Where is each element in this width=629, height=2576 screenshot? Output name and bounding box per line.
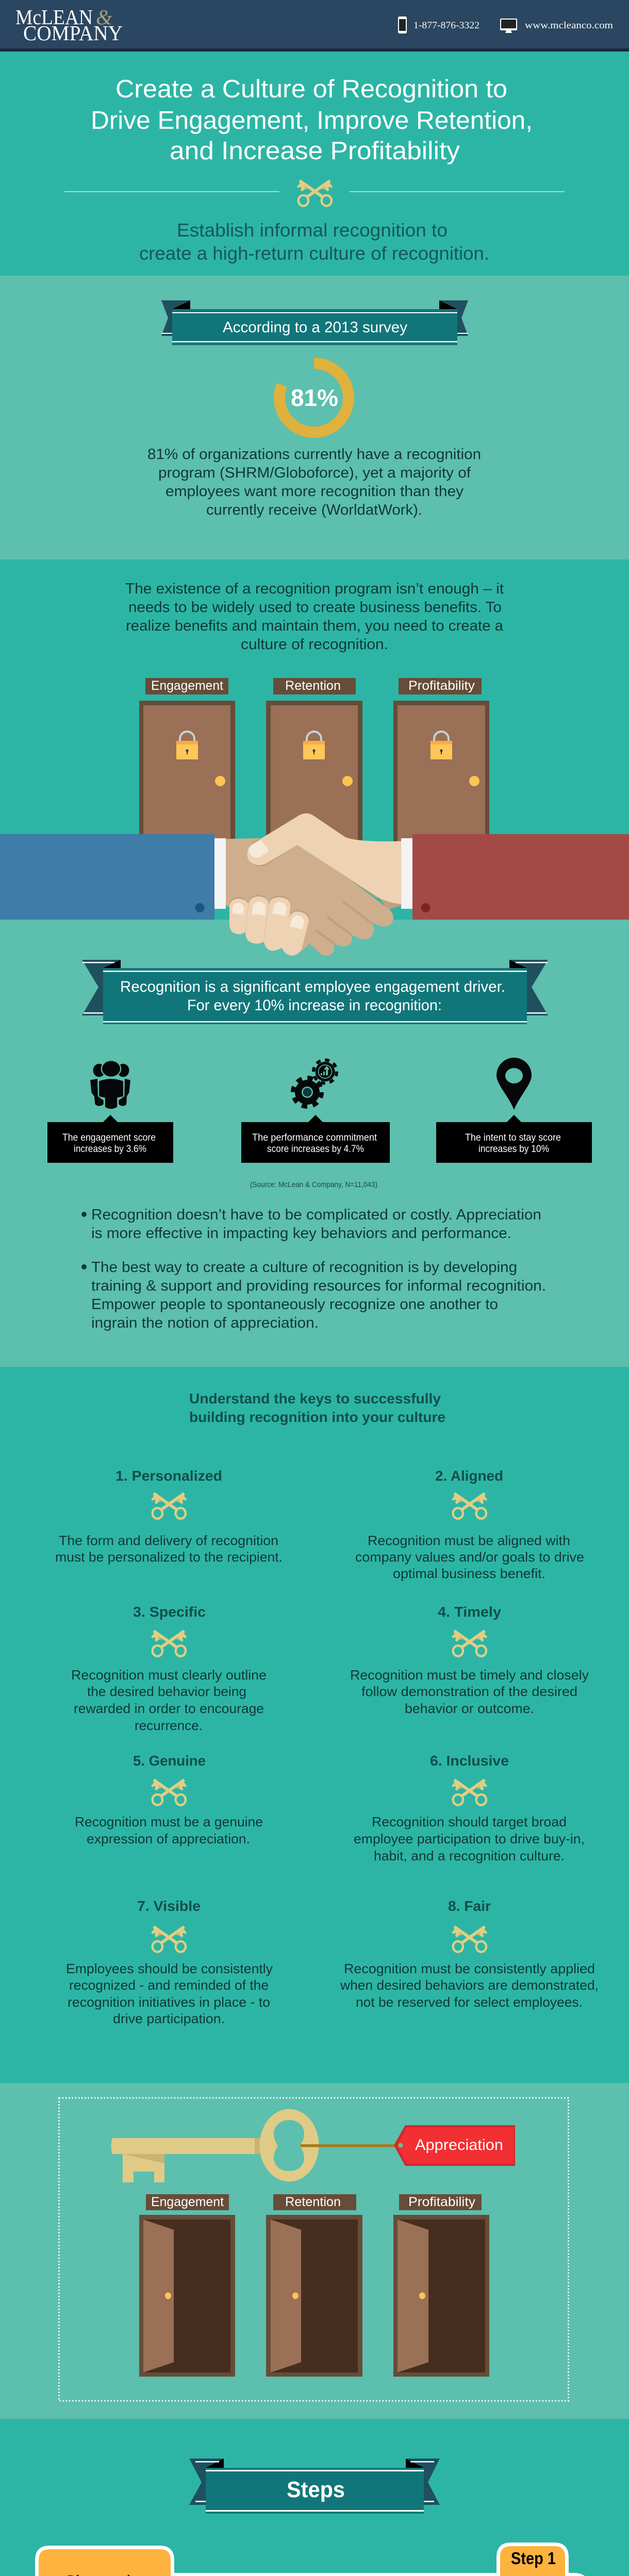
dotted frame — [59, 2098, 568, 2401]
ribbon: recognition driver: For every 10% increase in recognition: — [187, 997, 442, 1014]
panel: open door profitability: Profitability — [408, 2195, 476, 2209]
logo: & — [96, 5, 112, 29]
key 3: specific — [71, 1604, 267, 1733]
panel: locked door retention: Retention — [285, 679, 341, 693]
panel: open door profitability — [393, 2194, 489, 2377]
callout: engagement score: increases by 3.6% — [74, 1144, 146, 1155]
key 4: timely — [350, 1604, 589, 1716]
key 6: inclusive: habit, and a recognition culture. — [374, 1848, 565, 1863]
subtitle — [139, 219, 489, 264]
key 3: specific: rewarded in order to encourage — [74, 1701, 264, 1716]
key 6: inclusive: employee participation to drive buy-in, — [354, 1831, 585, 1846]
title — [91, 75, 533, 165]
ribbon: recognition driver: Recognition is a significant employee engagement driver. — [120, 978, 505, 995]
header bar — [0, 0, 629, 52]
ribbon: According to a 2013 survey: According to a 2013 survey — [223, 319, 407, 336]
ribbon: According to a 2013 survey — [161, 300, 468, 345]
string — [300, 2144, 401, 2147]
callout: performance commitment: The performance commitment — [252, 1132, 377, 1143]
survey paragraph: employees want more recognition than they — [165, 483, 464, 500]
key 5: genuine: expression of appreciation. — [87, 1831, 250, 1846]
key 7: visible — [66, 1898, 273, 2026]
key 7: visible: recognized - and reminded of the — [69, 1977, 269, 1993]
title: and Increase Profitability — [170, 137, 460, 165]
key 6: inclusive: 6. Inclusive — [430, 1753, 509, 1769]
heading: keys to success — [189, 1391, 445, 1425]
survey paragraph — [147, 446, 481, 518]
key 4: timely: 4. Timely — [438, 1604, 501, 1620]
panel: locked door profitability — [393, 678, 489, 845]
title: Drive Engagement, Improve Retention, — [91, 107, 533, 134]
key 2: aligned — [355, 1468, 584, 1581]
panel: locked door profitability: Profitability — [408, 679, 475, 693]
callout: performance commitment — [241, 1115, 390, 1163]
key 4: timely: Recognition must be timely and closely — [350, 1667, 589, 1683]
key 5: genuine: 5. Genuine — [133, 1753, 206, 1769]
key 5: genuine: Recognition must be a genuine — [75, 1814, 263, 1829]
existence paragraph: culture of recognition. — [241, 636, 388, 653]
key 5: genuine — [75, 1753, 263, 1846]
logo — [15, 5, 123, 45]
phone number: 1-877-876-3322 — [413, 20, 479, 31]
key 7: visible: Employees should be consistently — [66, 1961, 273, 1976]
key 2: aligned: company values and/or goals to drive — [355, 1549, 584, 1565]
key 8: fair — [340, 1898, 599, 2010]
callout: intent to stay — [436, 1115, 592, 1163]
key 8: fair: Recognition must be consistently applied — [344, 1961, 595, 1976]
tag: appreciation — [394, 2125, 515, 2166]
panel: step 1: Step 1 — [511, 2549, 556, 2568]
key 2: aligned: optimal business benefit. — [393, 1566, 545, 1581]
tag: appreciation: Appreciation — [415, 2137, 503, 2154]
existence paragraph: needs to be widely used to create business benefits. To — [128, 599, 502, 616]
source note: (Source: McLean & Company, N=11,043) — [250, 1180, 377, 1189]
survey paragraph: currently receive (WorldatWork). — [206, 502, 422, 518]
icon: gears — [293, 1060, 337, 1107]
donut chart: 81%: 81% — [291, 384, 338, 411]
existence paragraph: realize benefits and maintain them, you need to create a — [126, 618, 504, 634]
key 2: aligned: 2. Aligned — [435, 1468, 503, 1484]
subtitle: Establish informal recognition to — [177, 219, 448, 241]
key 3: specific: recurrence. — [135, 1718, 203, 1733]
subtitle: create a high-return culture of recognition. — [139, 243, 489, 264]
heading: keys to success: building recognition into your culture — [189, 1409, 445, 1425]
donut chart: 81% — [279, 363, 349, 432]
panel: open door retention — [266, 2194, 362, 2377]
key 8: fair: when desired behaviors are demonstrated, — [340, 1977, 599, 1993]
icon: location pin — [496, 1058, 532, 1110]
panel: locked door engagement: Engagement — [151, 679, 223, 693]
icon: monitor — [500, 19, 517, 33]
survey paragraph: 81% of organizations currently have a recognition — [147, 446, 481, 463]
website: www.mcleanco.com — [525, 20, 613, 31]
survey paragraph: program (SHRM/Globoforce), yet a majority of — [158, 465, 471, 481]
bullet list: Empower people to spontaneously recognize one another to — [91, 1296, 498, 1313]
key 1: personalized: The form and delivery of recognition — [59, 1533, 278, 1548]
bullet list — [81, 1207, 546, 1331]
panel: open door retention: Retention — [285, 2195, 341, 2209]
key 8: fair: not be reserved for select employees. — [356, 1994, 583, 2010]
icon: people — [90, 1061, 130, 1109]
existence paragraph — [125, 581, 504, 653]
logo: McLEAN — [15, 5, 93, 29]
key 8: fair: 8. Fair — [448, 1898, 491, 1914]
bullet list: The best way to create a culture of recognition is by developing — [91, 1259, 517, 1276]
callout: intent to stay: The intent to stay score — [465, 1132, 561, 1143]
ribbon: recognition driver — [82, 960, 548, 1024]
key 3: specific: Recognition must clearly outline — [71, 1667, 267, 1683]
callout: performance commitment: score increases by 4.7% — [267, 1144, 364, 1155]
bullet list: training & support and providing resources for informal recognition. — [91, 1278, 546, 1294]
panel: open door engagement — [139, 2194, 235, 2377]
icon: phone — [398, 16, 407, 33]
ribbon: steps: Steps — [287, 2477, 345, 2502]
key 1: personalized: must be personalized to the recipient. — [55, 1549, 283, 1565]
heading: keys to success: Understand the keys to successfully — [189, 1391, 441, 1406]
icon: crossed keys divider — [64, 181, 565, 206]
callout: engagement score: The engagement score — [62, 1132, 156, 1143]
key 6: inclusive: Recognition should target broad — [372, 1814, 567, 1829]
callout: engagement score — [47, 1115, 173, 1163]
key 4: timely: behavior or outcome. — [405, 1701, 534, 1716]
key 6: inclusive — [354, 1753, 585, 1863]
title: Create a Culture of Recognition to — [115, 75, 507, 103]
key 3: specific: 3. Specific — [133, 1604, 206, 1620]
illustration: handshake — [0, 814, 629, 956]
key 7: visible: 7. Visible — [137, 1898, 201, 1914]
key 4: timely: follow demonstration of the desired — [361, 1684, 577, 1699]
key 7: visible: recognition initiatives in place - to — [68, 1994, 270, 2010]
panel: locked door retention — [266, 678, 362, 845]
panel: locked door engagement — [139, 678, 235, 845]
existence paragraph: The existence of a recognition program isn’t enough – it — [125, 581, 504, 597]
illustration: appreciation key — [111, 2109, 515, 2182]
key 7: visible: drive participation. — [113, 2011, 225, 2026]
bullet list: ingrain the notion of appreciation. — [91, 1315, 319, 1331]
panel: open door engagement: Engagement — [151, 2195, 224, 2209]
key 3: specific: the desired behavior being — [87, 1684, 246, 1699]
bullet list: is more effective in impacting key behaviors and performance. — [91, 1225, 511, 1242]
bullet list: Recognition doesn’t have to be complicated or costly. Appreciation — [91, 1207, 541, 1223]
key 1: personalized — [55, 1468, 283, 1565]
callout: intent to stay: increases by 10% — [478, 1144, 549, 1155]
key 1: personalized: 1. Personalized — [115, 1468, 222, 1484]
panel: step 1 — [37, 2544, 589, 2576]
ribbon: steps — [189, 2459, 440, 2514]
key 2: aligned: Recognition must be aligned with — [368, 1533, 570, 1548]
logo: COMPANY — [23, 21, 123, 45]
